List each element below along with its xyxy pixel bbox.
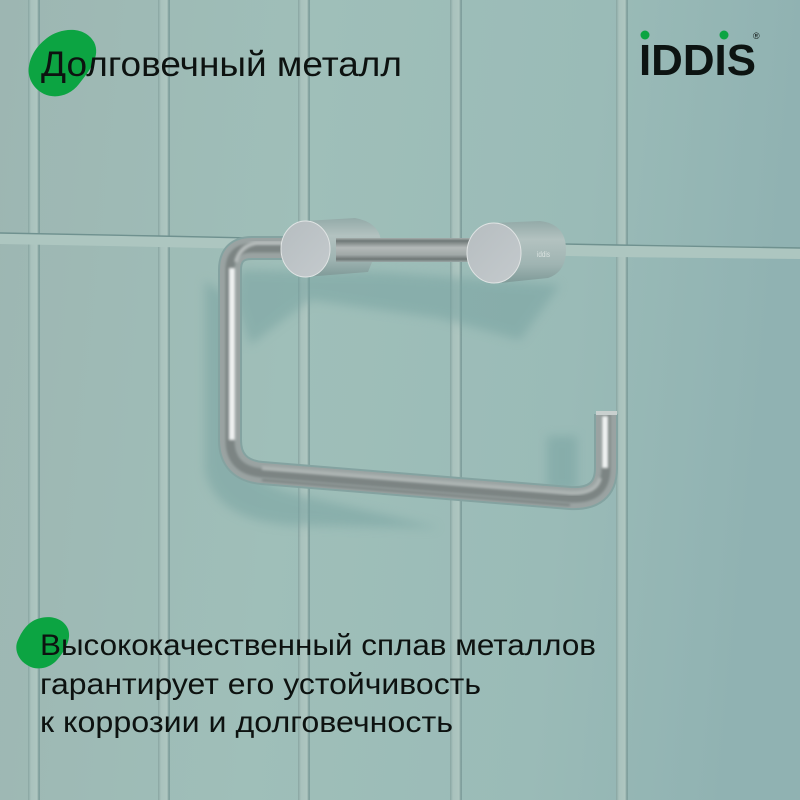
logo: IDDIS: IDDIS bbox=[639, 36, 756, 85]
body text bbox=[40, 629, 596, 739]
logo: IDDIS: ® bbox=[753, 31, 760, 41]
body text: Высококачественный сплав металлов bbox=[40, 629, 596, 662]
connecting rod bbox=[336, 238, 470, 262]
green blob: heading bbox=[29, 30, 96, 96]
heading: Долговечный металл bbox=[41, 45, 402, 84]
body text: гарантирует его устойчивость bbox=[40, 668, 481, 701]
toilet paper holder bbox=[229, 218, 617, 505]
right mount disc bbox=[467, 223, 521, 283]
tube end cap bbox=[596, 411, 617, 415]
left mount disc bbox=[281, 221, 330, 277]
green blob: body text bbox=[16, 617, 69, 668]
left mount cylinder bbox=[305, 218, 381, 277]
shadows of the holder bbox=[205, 270, 577, 528]
holder ring: bent tube bbox=[229, 243, 608, 505]
body text: к коррозии и долговечность bbox=[40, 706, 453, 739]
engraved brand mark: iddis bbox=[537, 250, 550, 259]
right mount cylinder bbox=[494, 221, 566, 283]
